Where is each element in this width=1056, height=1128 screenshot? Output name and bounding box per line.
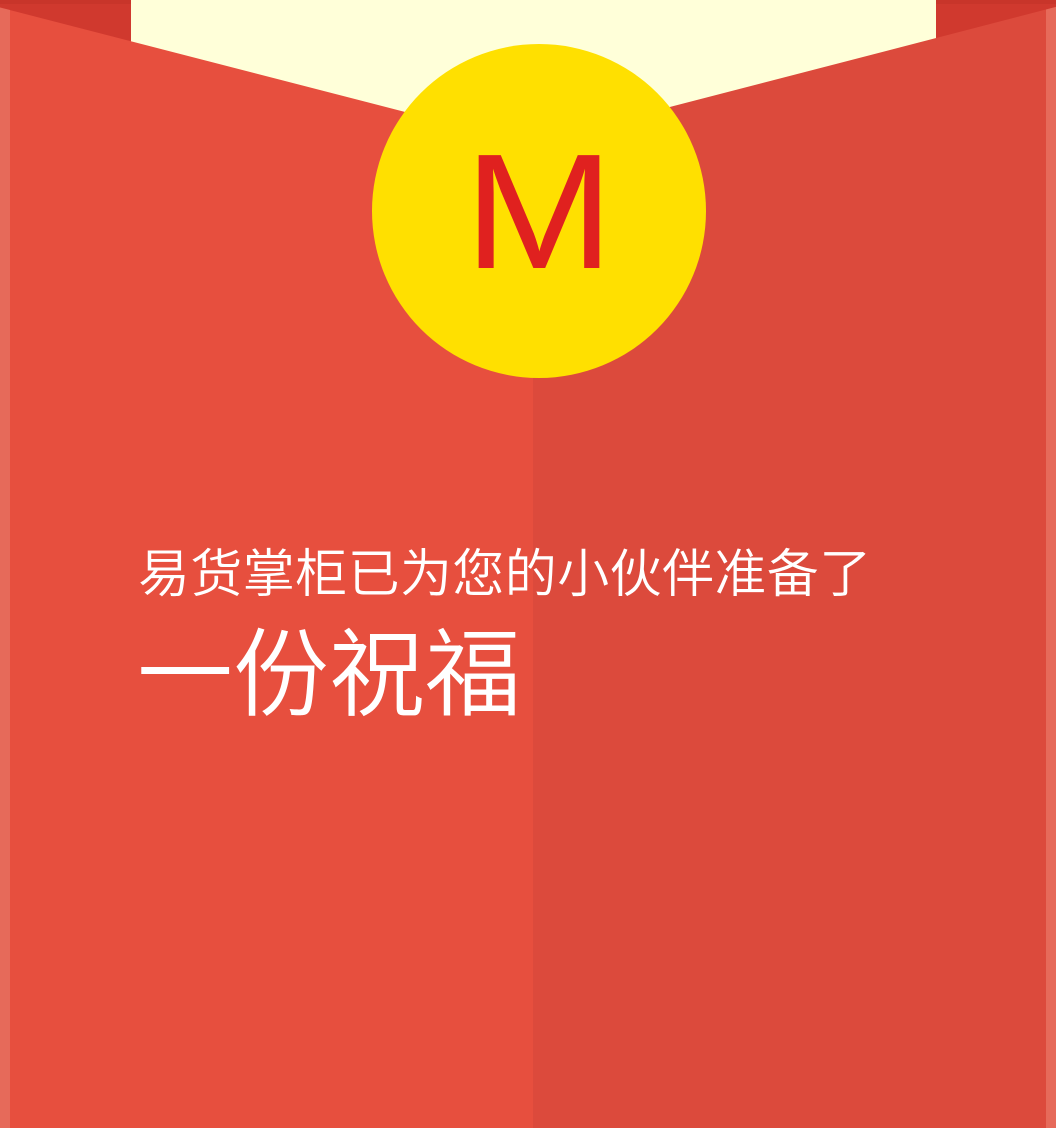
cream letter insert	[131, 0, 936, 150]
envelope right panel	[533, 7, 1056, 1128]
envelope left panel	[0, 8, 533, 1128]
envelope top corners behind the flap	[0, 0, 1056, 50]
yellow seal with M: M	[464, 120, 614, 303]
subtitle text: 易货掌柜已为您的小伙伴准备了	[138, 532, 872, 607]
right edge strip	[1046, 7, 1056, 1128]
main title text: 一份祝福	[137, 597, 521, 736]
yellow seal with M	[372, 44, 706, 378]
left edge strip	[0, 8, 10, 1128]
